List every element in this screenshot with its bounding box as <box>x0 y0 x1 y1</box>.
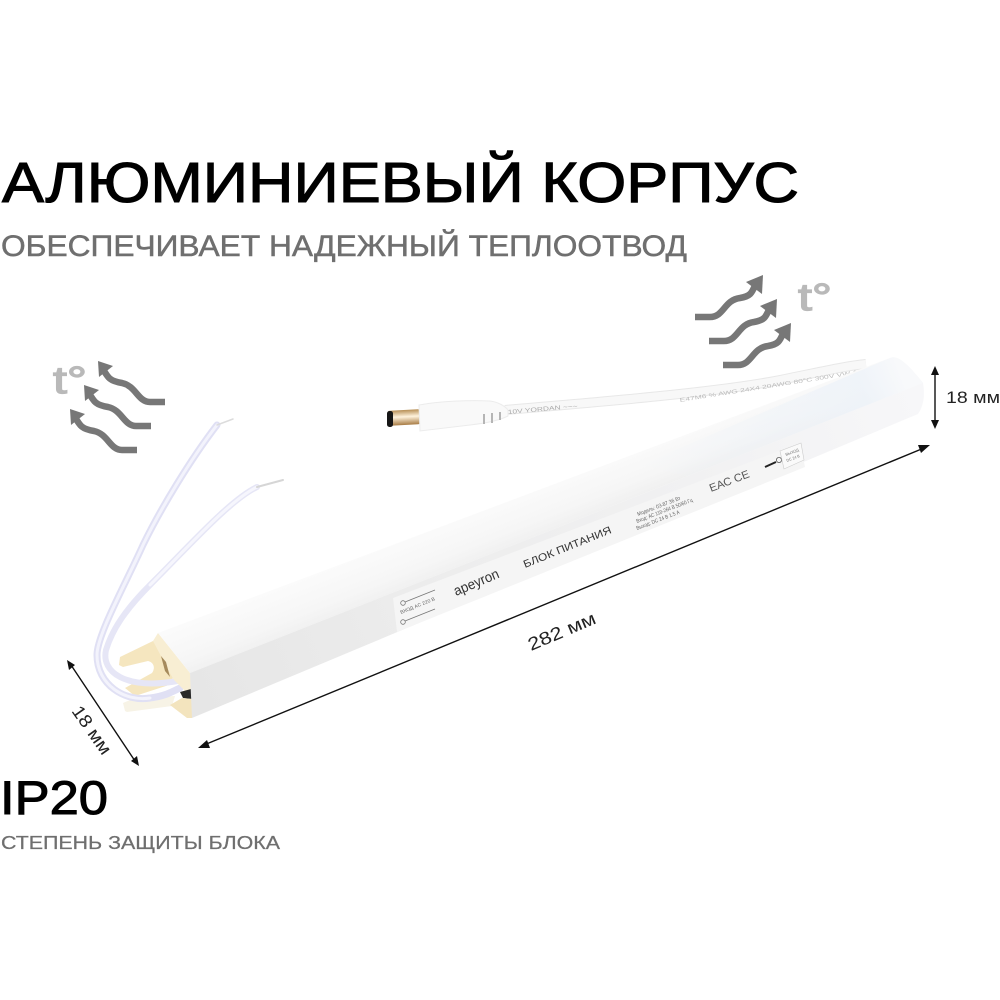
input label: ВХОД AC 220 В <box>400 596 436 616</box>
cable <box>505 364 866 410</box>
IP rating: IP20 <box>0 771 108 824</box>
input terminals <box>401 590 435 624</box>
IP description: СТЕПЕНЬ ЗАЩИТЫ БЛОКА <box>1 833 280 853</box>
cable print second: E47M6 % AWG 24X4 20AWG 80°C 300V VW-1 <box>679 370 858 404</box>
specifications: Выход: DC 24 В 1.5 А <box>636 510 681 532</box>
specifications: Вход: AC 110-264 В 50/60 Гц <box>636 498 694 525</box>
dimension: length 282 mm <box>198 445 930 748</box>
dimension: length 282 mm: 282 мм <box>525 608 599 655</box>
pin tip <box>387 411 393 427</box>
cap slot <box>161 656 170 677</box>
power supply body <box>97 357 924 718</box>
specifications: Модель: 03-87 36 Вт <box>637 496 682 518</box>
specifications <box>636 496 694 532</box>
dimension: height 18 mm: 18 мм <box>946 388 1000 407</box>
brand: apeyron <box>451 565 501 599</box>
output cable with connector <box>387 364 866 431</box>
output terminal <box>765 443 804 469</box>
connector housing <box>419 401 508 431</box>
top face bluish end <box>640 357 923 477</box>
lower cap prong <box>170 698 192 718</box>
pin <box>388 409 420 426</box>
dimension: depth 18 mm: 18 мм <box>68 702 116 758</box>
pale lower flange <box>123 696 175 712</box>
top face <box>158 357 923 673</box>
output terminal: ВЫХОД <box>785 447 800 457</box>
dark gap <box>180 689 192 699</box>
input wires <box>97 419 283 699</box>
dimension: height 18 mm <box>931 366 1000 429</box>
icon: heat arrows left <box>70 361 165 450</box>
subtitle: ОБЕСПЕЧИВАЕТ НАДЕЖНЫЙ ТЕПЛООТВОД <box>1 229 687 263</box>
label area <box>393 443 805 632</box>
dimension: depth 18 mm <box>67 660 139 766</box>
cap side strip <box>153 633 192 691</box>
icon: heat arrows right <box>695 275 791 365</box>
connector ribs <box>484 412 500 424</box>
product name: БЛОК ПИТАНИЯ <box>522 524 613 571</box>
label: t degrees right: t° <box>798 277 832 319</box>
label: t degrees left: t° <box>53 360 87 402</box>
title: АЛЮМИНИЕВЫЙ КОРПУС <box>2 150 799 215</box>
cream end cap upper prong <box>119 640 175 696</box>
output terminal: DC 24 В <box>786 453 801 463</box>
certification marks: ЕАС СЕ <box>708 469 751 495</box>
cable print: 10V YORDAN ~~~ <box>508 404 579 416</box>
front face <box>190 383 924 718</box>
